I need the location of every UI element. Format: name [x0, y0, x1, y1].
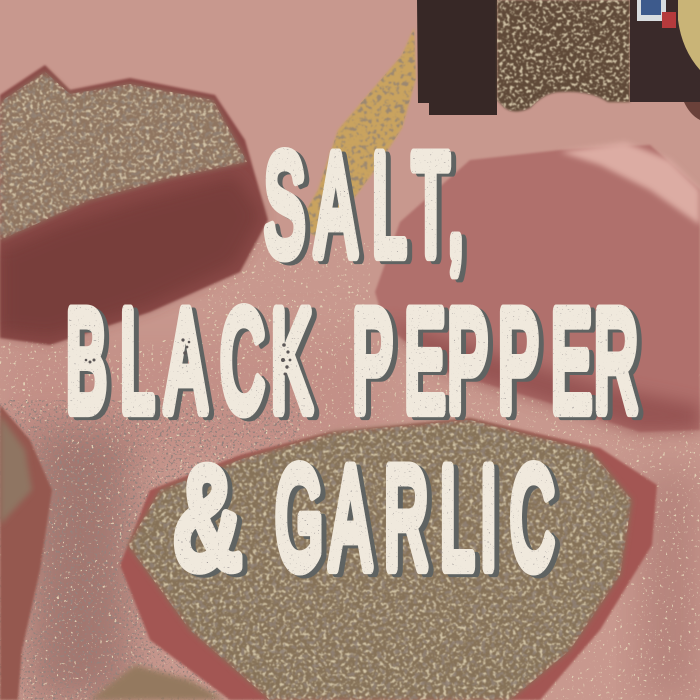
pepper speckle on letters: [85, 338, 291, 376]
glass with seasoning: [497, 0, 630, 112]
line 3: garlic: GARLIC: [275, 438, 554, 598]
steak: bottom left: [0, 405, 52, 700]
label logo: [637, 0, 666, 21]
steak: bottom centre: [120, 418, 657, 700]
steak: bottom edge fragment: [90, 665, 225, 700]
label red tag: [662, 12, 676, 28]
steak: top left: [0, 65, 268, 345]
seasoning stream: [298, 28, 416, 236]
line 2: black pepper: BLACK PEPPER: [66, 281, 638, 441]
bottle label: [630, 0, 700, 102]
bottle cap: [417, 0, 497, 115]
line 3: ampersand: &: [175, 437, 240, 597]
lower bottle shade: [684, 102, 700, 120]
line 1: salt: SALT,: [264, 125, 464, 285]
spice bottle: [417, 0, 700, 120]
label gold panel: [678, 0, 700, 70]
steak: right: [375, 142, 700, 432]
title text: [66, 125, 638, 598]
